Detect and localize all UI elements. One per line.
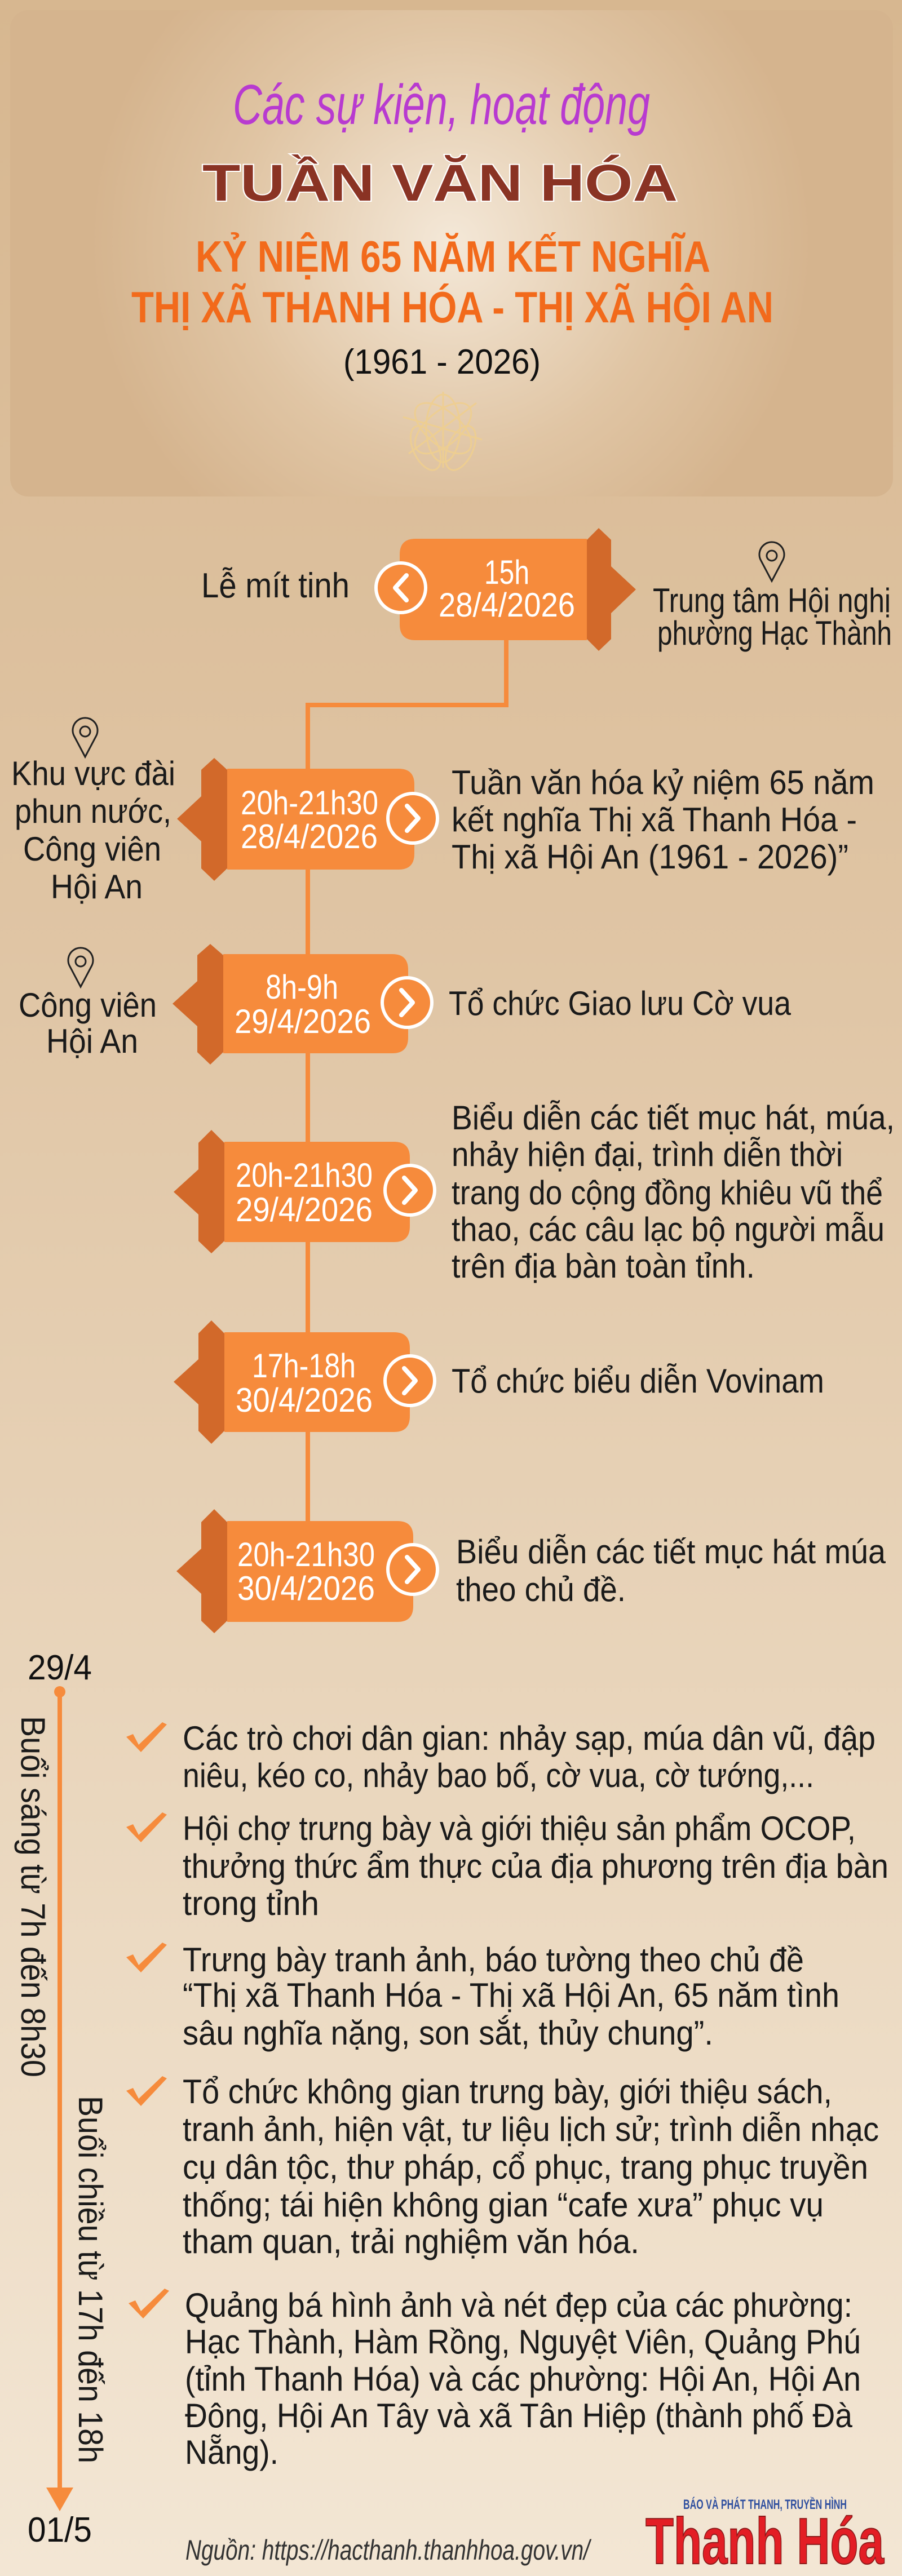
location 2: phun nước, <box>15 792 171 830</box>
event 4: 20h-21h30 <box>236 1156 373 1194</box>
activity 5 <box>129 2286 861 2471</box>
description 2: Tuần văn hóa kỷ niệm 65 năm <box>452 764 874 801</box>
location 2: Công viên <box>23 830 161 868</box>
activity 1 <box>126 1719 876 1794</box>
icon: chevron left <box>376 563 426 613</box>
description 2 <box>452 764 874 876</box>
event 5: 17h-18h <box>252 1347 356 1385</box>
event 3: 29/4/2026 <box>235 1003 371 1040</box>
orange title line 2: THỊ XÃ THANH HÓA - THỊ XÃ HỘI AN <box>131 282 773 332</box>
icon: check <box>129 2289 169 2318</box>
event 2 <box>177 758 437 881</box>
event 2: 28/4/2026 <box>241 818 378 855</box>
description 4: nhảy hiện đại, trình diễn thời <box>452 1136 843 1173</box>
description 3: Tổ chức Giao lưu Cờ vua <box>449 985 792 1022</box>
icon: chevron right <box>388 1545 437 1594</box>
orange title line 1: KỶ NIỆM 65 NĂM KẾT NGHĨA <box>196 232 710 281</box>
event 4: 29/4/2026 <box>236 1191 373 1229</box>
script subtitle: Các sự kiện, hoạt động <box>233 73 650 136</box>
icon: check <box>126 2076 167 2106</box>
icon: chevron right <box>385 1165 435 1215</box>
years: (1961 - 2026) <box>343 343 541 382</box>
timeline connector <box>308 640 506 1521</box>
activity 2 <box>126 1810 888 1922</box>
activity 1: niêu, kéo co, nhảy bao bố, cờ vua, cờ tướng,... <box>183 1757 814 1794</box>
header panel <box>10 10 893 496</box>
activity 5: Đông, Hội An Tây và xã Tân Hiệp (thành phố Đà <box>185 2397 853 2435</box>
icon: chevron right <box>382 978 432 1027</box>
activity 2: Hội chợ trưng bày và giới thiệu sản phẩm OCOP, <box>183 1810 856 1847</box>
icon: pin <box>68 948 93 987</box>
description 2: Thị xã Hội An (1961 - 2026)” <box>452 838 848 876</box>
source: Nguồn: https://hacthanh.thanhhoa.gov.vn/ <box>185 2534 592 2566</box>
event 3 <box>173 944 432 1065</box>
event 6: 20h-21h30 <box>237 1536 375 1573</box>
description 6: theo chủ đề. <box>456 1571 626 1608</box>
activity 4 <box>126 2073 879 2260</box>
icon: pin <box>73 718 98 757</box>
activity 3: sâu nghĩa nặng, son sắt, thủy chung”. <box>183 2014 713 2052</box>
icon: check <box>126 1812 167 1842</box>
icon: flower decoration <box>403 392 482 475</box>
event 1: Lễ mít tinh: 28/4/2026 <box>439 586 575 624</box>
location 2: Hội An <box>51 868 143 906</box>
description 6 <box>456 1533 886 1608</box>
vertical label: morning: Buổi sáng từ 7h đến 8h30 <box>14 1716 52 2077</box>
icon: pin <box>759 542 784 581</box>
activity 5: Hạc Thành, Hàm Rồng, Nguyệt Viên, Quảng Phú <box>185 2323 861 2361</box>
location 1 <box>653 542 892 652</box>
description 5: Tổ chức biểu diễn Vovinam <box>452 1362 824 1400</box>
event 5: 30/4/2026 <box>236 1381 373 1419</box>
main title: TUẦN VĂN HÓA <box>202 154 678 212</box>
event 3: 8h-9h <box>266 968 338 1006</box>
icon: chevron right <box>385 1356 435 1406</box>
location 2: Khu vực đài <box>11 755 175 792</box>
location 3: Công viên <box>19 986 157 1024</box>
activity 5: Quảng bá hình ảnh và nét đẹp của các phường: <box>185 2286 852 2324</box>
activity 3 <box>126 1941 839 2052</box>
event 5 <box>174 1320 435 1444</box>
date axis: 01/5 <box>28 2511 92 2550</box>
location 3 <box>19 948 157 1060</box>
arrow <box>46 2488 73 2511</box>
icon: check <box>126 1722 167 1752</box>
activity 2: trong tỉnh <box>183 1885 319 1922</box>
event 2: 20h-21h30 <box>241 784 378 822</box>
event 6: 30/4/2026 <box>237 1569 375 1607</box>
location 2 <box>11 718 175 906</box>
event 4 <box>174 1130 435 1253</box>
activity 3: Trưng bày tranh ảnh, báo tường theo chủ đề <box>183 1941 804 1979</box>
event 1: Lễ mít tinh: 15h <box>484 553 529 591</box>
vertical label: afternoon: Buổi chiều từ 17h đến 18h <box>72 2096 109 2463</box>
icon: check <box>126 1943 167 1972</box>
description 4 <box>452 1099 895 1285</box>
icon: chevron right <box>388 793 437 843</box>
label: Lễ mít tinh: Lễ mít tinh <box>201 566 350 605</box>
description 2: kết nghĩa Thị xã Thanh Hóa - <box>452 801 857 839</box>
activity 4: Tổ chức không gian trưng bày, giới thiệu sách, <box>183 2073 832 2111</box>
date axis <box>28 1648 92 2550</box>
activity 4: tham quan, trải nghiệm văn hóa. <box>183 2223 639 2260</box>
event 1: Lễ mít tinh <box>376 528 636 651</box>
activity 5: (tỉnh Thanh Hóa) và các phường: Hội An, Hội An <box>185 2360 861 2398</box>
event 6 <box>176 1509 437 1633</box>
activity 5: Nẵng). <box>185 2433 278 2471</box>
activity 3: “Thị xã Thanh Hóa - Thị xã Hội An, 65 năm tình <box>183 1976 839 2014</box>
activity 4: cụ dân tộc, thư pháp, cổ phục, trang phục truyền <box>183 2148 868 2186</box>
location 3: Hội An <box>46 1022 138 1060</box>
description 4: trên địa bàn toàn tỉnh. <box>452 1247 755 1285</box>
date axis: 29/4 <box>28 1648 92 1687</box>
activity 4: thống; tái hiện không gian “cafe xưa” phục vụ <box>183 2186 824 2224</box>
